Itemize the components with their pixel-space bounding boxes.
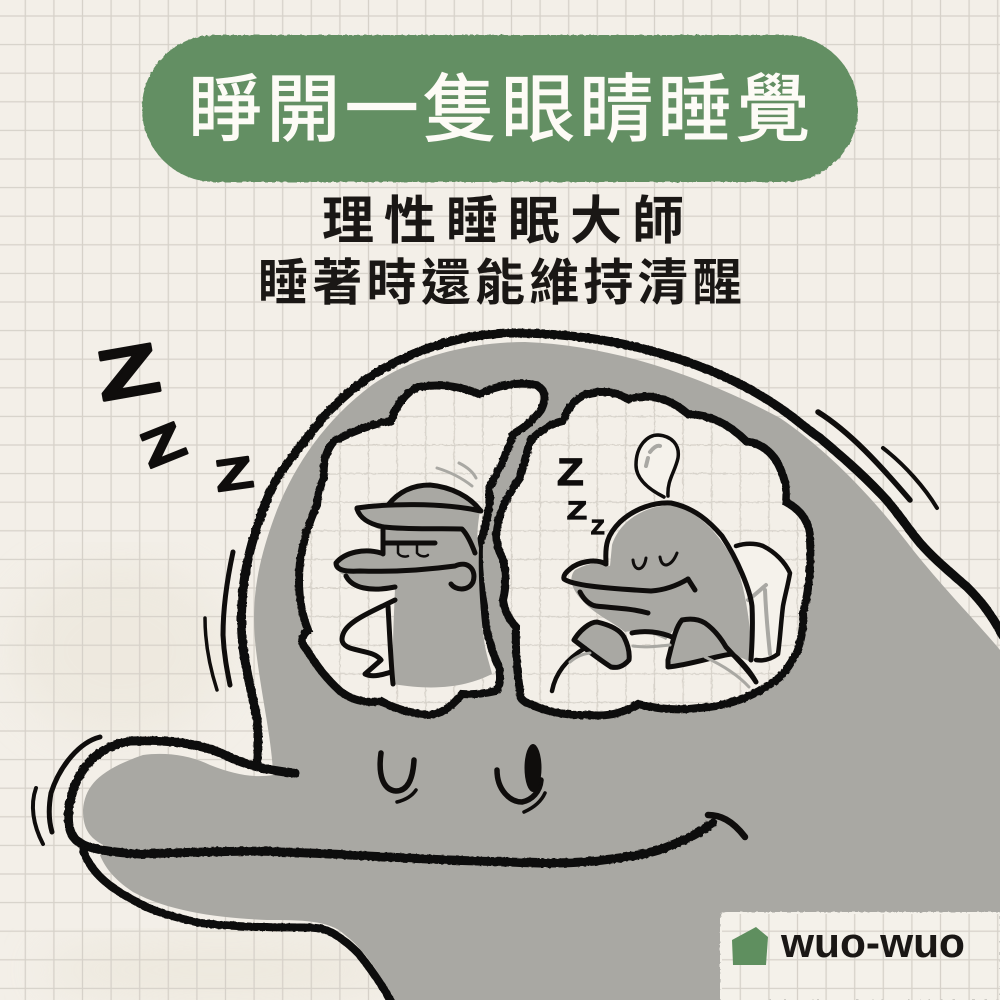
hat motion lines bbox=[437, 463, 476, 486]
left eye bbox=[380, 753, 416, 802]
logo house icon bbox=[732, 927, 768, 965]
subtitle: 理性睡眠大師 bbox=[322, 193, 684, 251]
sleeping eyes bbox=[633, 553, 677, 569]
title text: 睜開一隻眼睛睡覺 bbox=[188, 68, 810, 151]
mouth corner tick bbox=[708, 815, 745, 837]
small z letters: Z bbox=[557, 451, 584, 493]
body outline: head bbox=[242, 333, 1000, 763]
logo card bbox=[720, 912, 1000, 1000]
small z letters bbox=[557, 451, 605, 539]
thought bubble: alert half bbox=[299, 384, 545, 715]
zzz left of head: Z bbox=[91, 329, 165, 416]
pillow bbox=[736, 544, 790, 660]
lower jaw outline bbox=[83, 850, 392, 1000]
small z letters: Z bbox=[567, 497, 587, 525]
flippers bbox=[574, 622, 629, 667]
subtitle: 睡著時還能維持清醒 bbox=[258, 255, 742, 311]
alert eyes bbox=[398, 545, 428, 557]
motion lines bbox=[33, 412, 937, 844]
zzz left of head: Z bbox=[133, 411, 193, 479]
small z letters: Z bbox=[591, 517, 605, 539]
right eye bbox=[497, 744, 545, 812]
logo wordmark: wuo-wuo bbox=[780, 919, 965, 966]
subtitle bbox=[258, 193, 742, 311]
alert dolphin bbox=[336, 463, 492, 687]
title banner bbox=[142, 35, 858, 182]
blanket folds bbox=[552, 648, 585, 691]
body outline: upper snout and mouth bbox=[68, 741, 713, 863]
sleeping dolphin in bed bbox=[552, 435, 756, 691]
zzz left of head: Z bbox=[212, 448, 256, 501]
sleeping dolphin: body bbox=[68, 333, 1000, 1000]
dream bubble bbox=[636, 435, 678, 497]
thought bubble: sleeping half bbox=[496, 392, 810, 716]
zzz left of head bbox=[91, 329, 256, 501]
